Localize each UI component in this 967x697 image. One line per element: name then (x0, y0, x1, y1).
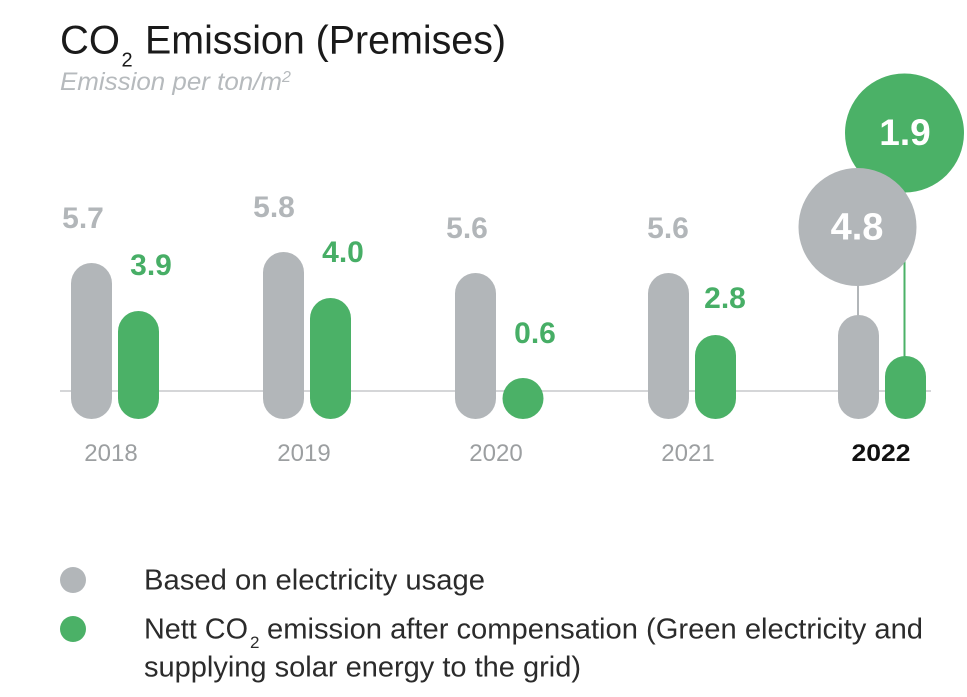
chart: 2021: 2021 (661, 440, 715, 467)
legend: nett emission: emission after compensation (Green electricity and (267, 614, 923, 646)
callout: 1.9: 1.9 (879, 112, 931, 153)
chart: 2018 (62, 202, 172, 467)
chart: 2019: 4.0 (322, 236, 364, 269)
callout: 4.8: 4.8 (831, 206, 883, 248)
chart: 2020: 2020 (469, 440, 523, 467)
legend: nett emission (60, 614, 923, 684)
legend: electricity usage: Based on electricity usage (144, 564, 485, 596)
chart: 2021: 2.8 (704, 282, 746, 315)
title: Emission (Premises) (145, 18, 506, 62)
chart: 2018: 2018 (84, 440, 138, 467)
title: CO (60, 18, 120, 62)
title (60, 18, 506, 72)
chart: 2020 (446, 212, 556, 467)
chart: 2022 highlighted: 2022 (852, 440, 910, 467)
subtitle: Emission per ton/m (60, 68, 282, 96)
chart: 2019: 5.8 (253, 191, 295, 224)
subtitle: 2 (281, 69, 291, 86)
legend: nett emission: 2 (250, 633, 259, 652)
chart: 2019 (253, 191, 364, 467)
chart: 2020: 5.6 (446, 212, 488, 245)
legend: nett emission: Nett CO (144, 614, 248, 646)
title: 2 (122, 50, 133, 72)
chart: 2019: 2019 (277, 440, 331, 467)
chart: 2020: 0.6 (514, 317, 556, 350)
chart: 2021: 5.6 (647, 212, 689, 245)
chart: 2021 (647, 212, 746, 467)
callout: 1.9 (845, 74, 964, 192)
chart: 2018: 5.7 (62, 202, 104, 235)
baseline (60, 390, 931, 392)
legend: nett emission: supplying solar energy to the grid) (144, 652, 581, 684)
chart: 2022 highlighted (798, 74, 964, 467)
chart: 2018: 3.9 (130, 249, 172, 282)
callout: 4.8 (798, 168, 916, 286)
